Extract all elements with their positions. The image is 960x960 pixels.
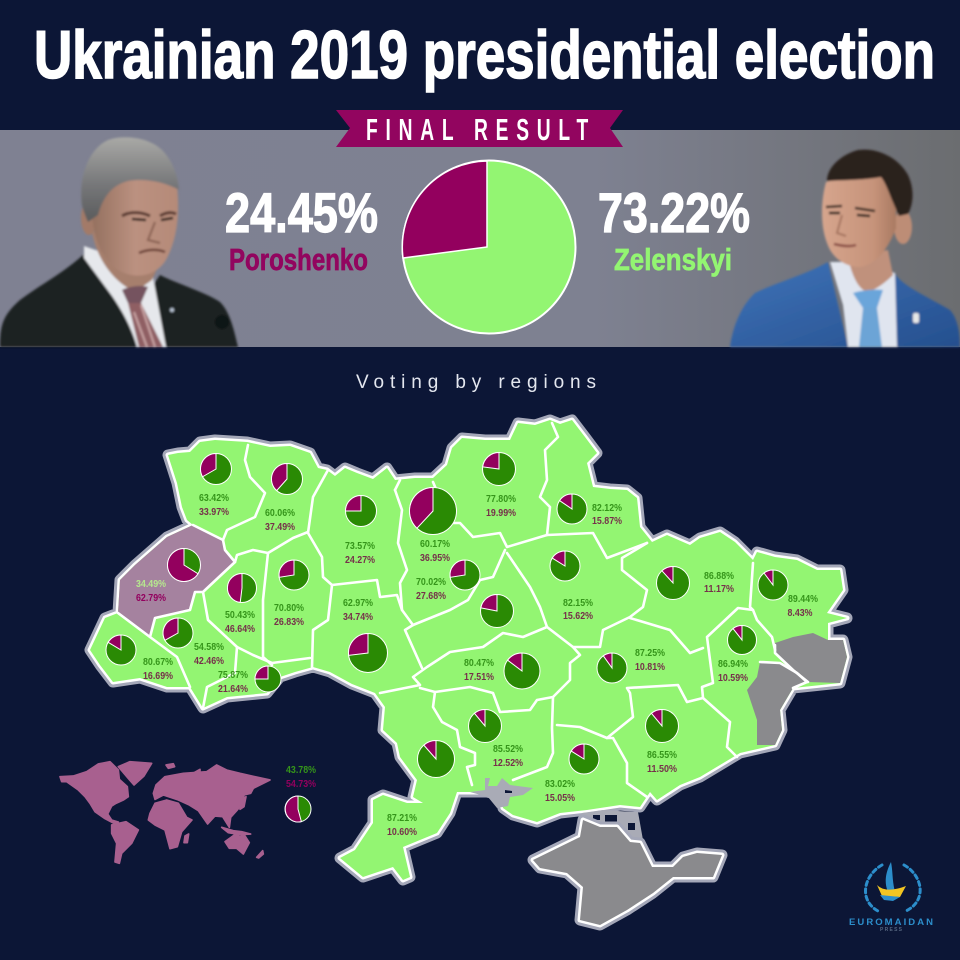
regional results: percentages: 89.44% <box>788 594 818 605</box>
regional results: percentages: 85.52% <box>493 744 523 755</box>
portrait: Zelenskyi <box>730 150 960 347</box>
pie: Zakarpattia <box>106 635 136 665</box>
pie: Sumy <box>557 494 587 524</box>
pie: Kyiv oblast <box>450 560 480 590</box>
regional results: percentages: 12.52% <box>493 758 523 769</box>
regional results: percentages: 10.81% <box>635 662 665 673</box>
regional results: percentages: 24.27% <box>345 555 375 566</box>
regional results: percentages: 19.99% <box>486 508 516 519</box>
regional results: percentages: 34.74% <box>343 612 373 623</box>
regional results: percentages: 10.60% <box>387 827 417 838</box>
banner: final result: FINAL RESULT <box>366 114 596 147</box>
pie: Vinnytsia <box>348 634 388 672</box>
pie: Khmelnytskyi <box>279 560 309 590</box>
pie: Ternopil <box>227 573 256 602</box>
regional results: percentages: 73.57% <box>345 541 375 552</box>
world result: 43.78% <box>286 765 316 776</box>
pie: Kyiv city <box>410 488 456 534</box>
pie: Rivne <box>271 464 302 494</box>
Poroshenko result: Poroshenko <box>229 242 368 277</box>
pie: Odesa <box>418 740 454 778</box>
Poroshenko result: 24.45% <box>225 181 378 244</box>
world result: 54.73% <box>286 779 316 790</box>
regional results: percentages: 50.43% <box>225 610 255 621</box>
panel: final result band <box>0 130 960 347</box>
regional results: percentages: 60.17% <box>420 539 450 550</box>
regional results: percentages: 60.06% <box>265 508 295 519</box>
regional results: percentages <box>136 493 818 838</box>
regional results: percentages: 77.80% <box>486 494 516 505</box>
pie: Kharkiv <box>656 566 690 600</box>
pie: Chernivtsi <box>255 666 281 692</box>
map: Crimea <box>533 820 722 925</box>
pie: Luhansk <box>758 570 788 600</box>
pie: Dnipropetrovsk <box>597 653 627 683</box>
regional results: percentages: 70.80% <box>274 603 304 614</box>
map: Ukraine regions <box>90 420 847 880</box>
regional results: percentages: 27.68% <box>416 591 446 602</box>
regional results: percentages: 83.02% <box>545 779 575 790</box>
national pie chart <box>402 160 576 334</box>
portrait: Poroshenko <box>0 137 238 347</box>
pie: Cherkasy <box>480 594 514 628</box>
regional results: percentages: 46.64% <box>225 624 255 635</box>
Zelenskyi result: Zelenskyi <box>614 242 732 277</box>
regional results: percentages: 75.87% <box>218 670 248 681</box>
regional results: percentages: 10.59% <box>718 673 748 684</box>
regional results: percentages: 86.55% <box>647 750 677 761</box>
pie: Kherson <box>569 744 599 774</box>
logo: Euromaidan Press: EUROMAIDAN <box>849 917 933 928</box>
regional results: percentages: 11.50% <box>647 764 677 775</box>
regional results: percentages: 62.79% <box>136 593 166 604</box>
world result <box>285 765 316 822</box>
regional results: percentages: 36.95% <box>420 553 450 564</box>
subheading: Voting by regions <box>356 372 596 393</box>
pie: Volyn <box>200 454 232 484</box>
regional results: percentages: 8.43% <box>788 608 813 619</box>
regional results: percentages: 87.25% <box>635 648 665 659</box>
regional results: percentages: 82.15% <box>563 598 593 609</box>
regional results: percentages: 15.05% <box>545 793 575 804</box>
regional results: percentages: 82.12% <box>592 503 622 514</box>
regional results: percentages: 42.46% <box>194 656 224 667</box>
pie: Poltava <box>550 551 580 581</box>
logo: Euromaidan Press: PRESS <box>880 927 903 933</box>
regional results: percentages: 70.02% <box>416 577 446 588</box>
regional results: percentages: 15.87% <box>592 516 622 527</box>
regional results: percentages: 86.94% <box>718 659 748 670</box>
regional results: percentages: 15.62% <box>563 611 593 622</box>
regional results: percentages: 37.49% <box>265 522 295 533</box>
regional results: percentages: 21.64% <box>218 684 248 695</box>
regional results: percentages: 54.58% <box>194 642 224 653</box>
regional results: percentages: 16.69% <box>143 671 173 682</box>
regional results: percentages: 17.51% <box>464 672 494 683</box>
pie: Zhytomyr <box>346 496 376 526</box>
world map: voting abroad <box>60 762 270 863</box>
regional results: percentages: 63.42% <box>199 493 229 504</box>
regional results: percentages: 11.17% <box>704 584 734 595</box>
regional results: percentages: 87.21% <box>387 813 417 824</box>
regional results: percentages: 86.88% <box>704 571 734 582</box>
regional results: percentages: 80.67% <box>143 657 173 668</box>
Zelenskyi result <box>598 181 750 277</box>
logo: Euromaidan Press <box>849 862 933 933</box>
regional results: percentages: 26.83% <box>274 617 304 628</box>
pie: Zaporizhzhia <box>646 709 678 742</box>
regional results: percentages: 80.47% <box>464 658 494 669</box>
regional results: percentages: 33.97% <box>199 507 229 518</box>
regional results: percentages: 62.97% <box>343 598 373 609</box>
pie: Kirovohrad <box>504 653 540 689</box>
regional results: pies <box>106 452 788 778</box>
Poroshenko result <box>225 181 378 277</box>
pie: Mykolaiv <box>468 709 502 742</box>
regional results: percentages: 34.49% <box>136 579 166 590</box>
Zelenskyi result: 73.22% <box>598 181 750 244</box>
pie: Chernihiv <box>482 452 516 486</box>
pie: Donetsk <box>728 625 756 654</box>
pie: Lviv <box>168 548 200 582</box>
pie: Ivano-Frankivsk <box>163 618 193 648</box>
